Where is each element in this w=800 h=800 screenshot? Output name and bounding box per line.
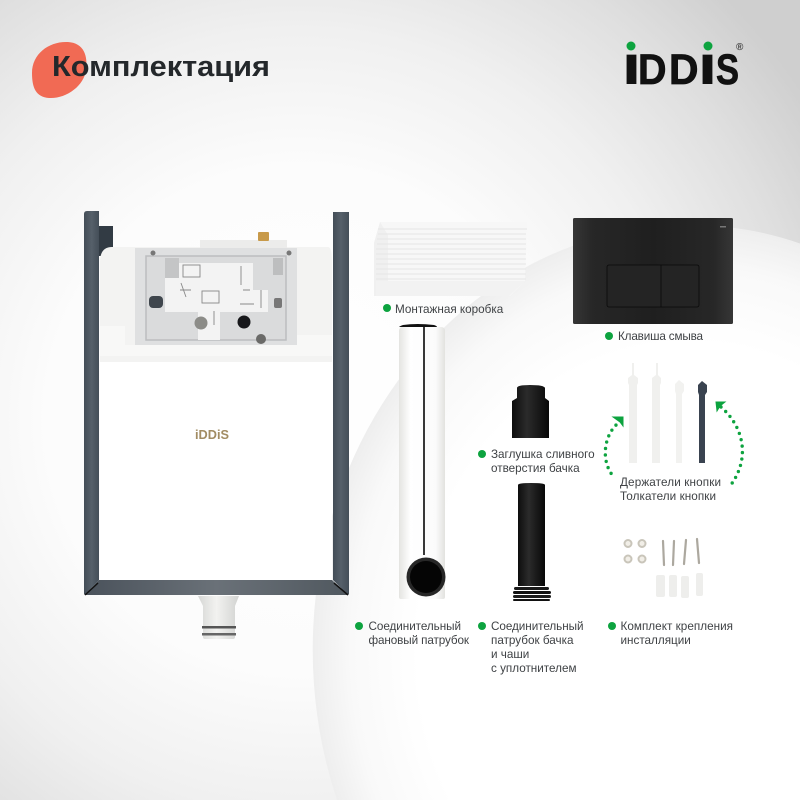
collar [100,326,332,356]
logo: IDDIS: D [638,46,666,94]
label: flush plate: Клавиша смыва [618,330,703,343]
tabs [165,258,179,278]
label: tank bowl connector [478,620,584,675]
label: fastening kit: инсталляции [620,634,691,647]
instruction icons [180,265,261,325]
screws [663,539,699,565]
logo: IDDIS [622,42,744,94]
left frame post [84,211,99,595]
label: tank bowl connector: и чаши [491,648,529,661]
metal screw [194,316,208,330]
instruction sticker [165,263,268,340]
label: drain plug: Заглушка сливного [491,448,595,461]
brand mark: iDDiS [195,427,229,442]
logo: IDDIS: I [622,46,641,94]
button holders and pushers [628,363,707,463]
label: drain plug [478,448,595,475]
label: holders and pushers [620,476,721,503]
heading: Комплектация: Комплектация [52,51,270,83]
label: holders and pushers: Держатели кнопки [620,476,721,489]
lower white panel [100,362,332,580]
logo: IDDIS: I [698,46,717,94]
label: mounting box: Монтажная коробка [395,303,504,316]
drain nozzle [198,596,239,639]
top connection block [200,240,287,250]
logo: IDDIS: S [716,46,739,94]
label: waste pipe connector: фановый патрубок [368,634,470,647]
holder 2 [652,363,661,463]
label: fastening kit: Комплект крепления [620,620,733,633]
label: drain plug: отверстия бачка [491,462,580,475]
tank bowl connector [513,483,551,601]
flush plate [573,218,733,324]
label: tank bowl connector: патрубок бачка [491,634,574,647]
black screw [238,316,250,328]
access plate [135,248,297,345]
right frame post [333,212,349,595]
washers [624,540,646,562]
drain plug [512,385,549,438]
pusher dark [698,381,707,463]
side fastener left [149,296,163,308]
dowels [656,573,703,598]
holder 1 [628,363,638,463]
icon: coral blob [32,42,86,98]
arrow: left dotted [605,417,623,476]
pusher white [675,380,684,463]
logo: IDDIS: ® [736,42,744,53]
heading: Комплектация [32,42,270,98]
pipe opening [406,558,446,596]
cistern body [100,247,332,580]
side fastener right [274,298,282,308]
label: waste pipe connector: Соединительный [368,620,461,633]
label: tank bowl connector: Соединительный [491,620,584,633]
label: holders and pushers: Толкатели кнопки [620,490,716,503]
corner screws [150,250,156,256]
fastening kit [624,539,703,598]
label: tank bowl connector: с уплотнителем [491,662,576,675]
round fastener [256,334,266,344]
waste pipe connector [399,324,446,599]
brass valve [258,232,269,241]
logo: IDDIS: D [669,46,698,94]
mounting box [374,222,527,296]
rear bracket [99,226,113,256]
frame mitre corners [85,583,348,595]
installation frame [84,211,349,639]
label: fastening kit [608,620,733,647]
frame base [85,580,348,595]
arrow: right dotted [716,402,742,486]
label: waste pipe connector [355,620,470,647]
